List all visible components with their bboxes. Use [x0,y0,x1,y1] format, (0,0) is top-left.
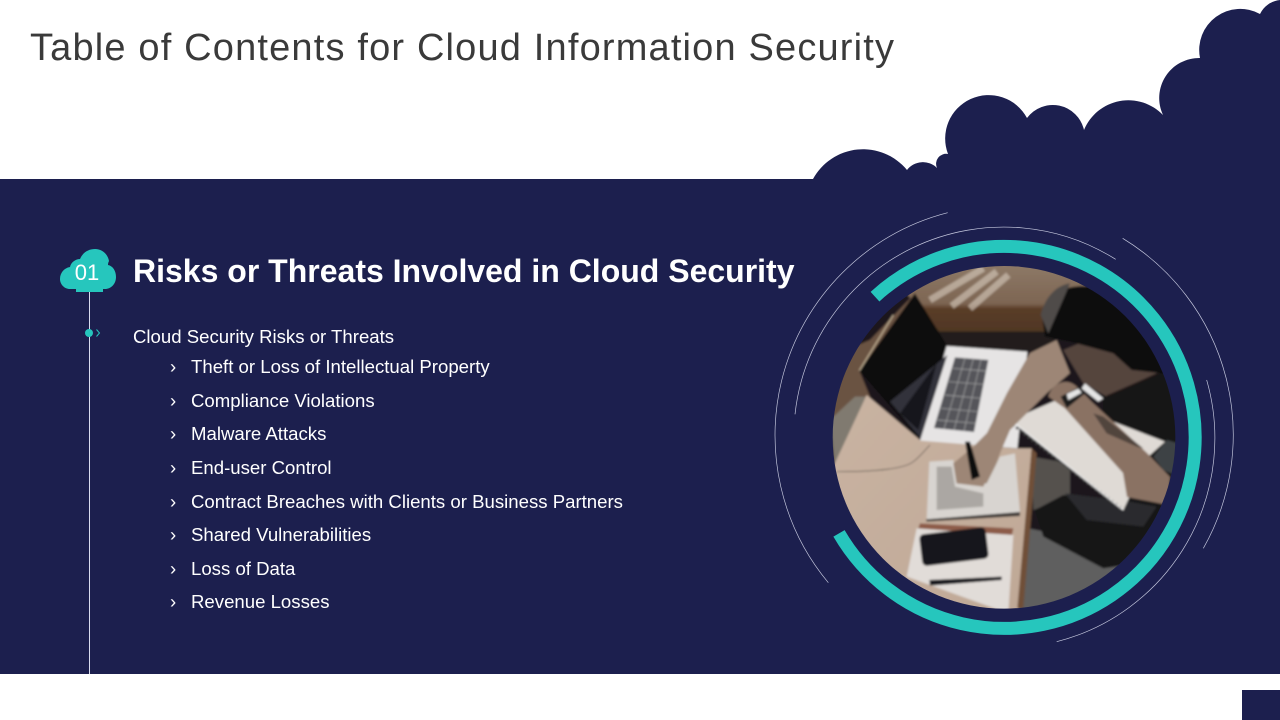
list item: › [170,524,176,545]
timeline line [89,290,90,674]
writing notebook [927,453,1020,519]
footer square [1242,690,1280,720]
photo: person writing at a laptop [830,263,1180,613]
list item: Contract Breaches with Clients or Business Partners [191,491,623,512]
icon: cloud number badge [60,249,116,292]
laptop screen [859,293,947,439]
head and hair [1062,342,1160,398]
title: Table of Contents for Cloud Information Security [30,27,895,69]
table [833,395,1032,613]
keyboard [934,357,988,432]
heading: Risks or Threats Involved in Cloud Security [133,253,794,289]
list of risks [170,356,623,612]
cable [837,445,930,472]
text block: list lead: Cloud Security Risks or Threats [133,326,394,347]
arms [1048,382,1170,505]
list item: Malware Attacks [191,423,326,444]
list item: Theft or Loss of Intellectual Property [191,356,490,377]
circular photo with rings [774,212,1234,642]
list item: End-user Control [191,457,332,478]
teal ring [839,246,1195,628]
list item: › [170,591,176,612]
list item: › [170,457,176,478]
watch [1061,387,1085,408]
shirt and legs [1039,372,1163,570]
hand and pen [953,464,986,488]
laptop base [920,346,1027,448]
list item: › [170,390,176,411]
list item: Revenue Losses [191,591,330,612]
list item: Loss of Data [191,558,295,579]
sofa [903,263,1087,337]
raised notebook [1011,400,1165,510]
badge number: 01 [75,260,99,285]
thin arcs [775,213,1233,642]
left floor [830,293,915,467]
list item: Compliance Violations [191,390,375,411]
list item: › [170,558,176,579]
list item: › [170,491,176,512]
timeline marker [85,329,100,337]
floor carpet [1019,528,1118,608]
list item: › [170,423,176,444]
list item: Shared Vulnerabilities [191,524,371,545]
lower notebook, phone and pen [918,523,1013,537]
list item: › [170,356,176,377]
